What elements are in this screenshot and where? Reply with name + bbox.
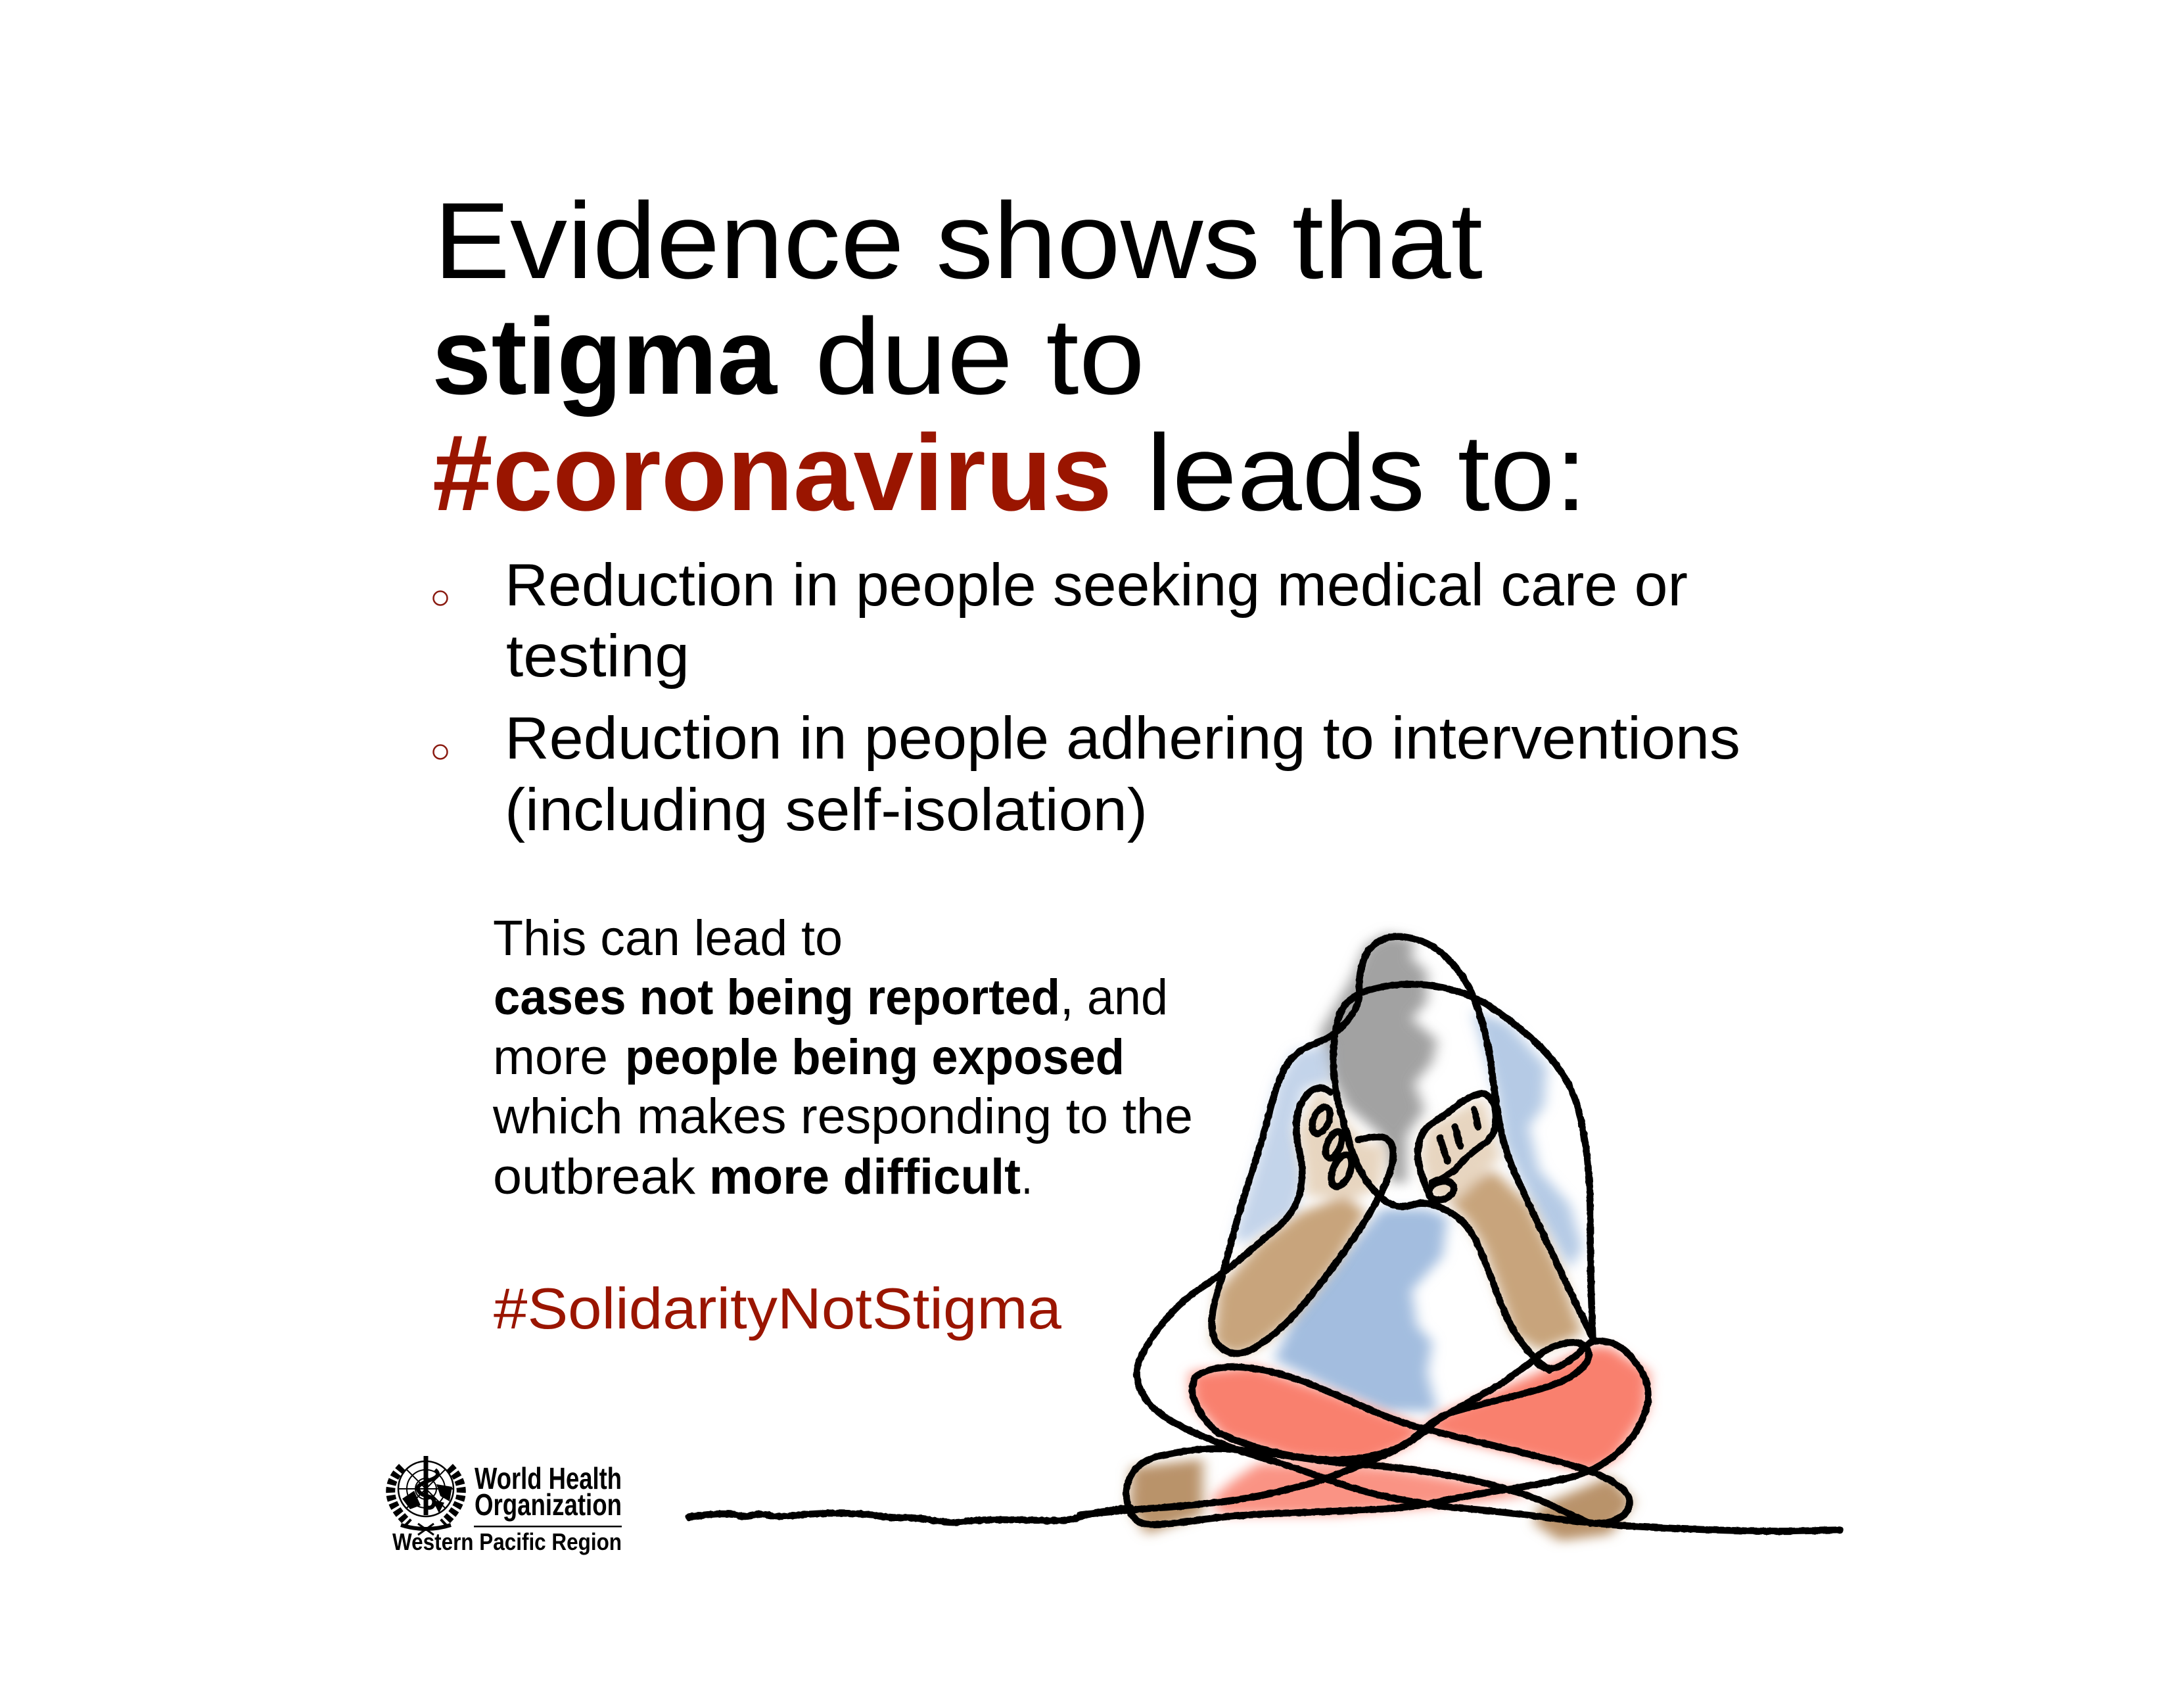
region name: Western Pacific Region: [392, 1528, 622, 1555]
consequence paragraph: more: [493, 1029, 608, 1085]
bullet 2 text: (including self-isolation): [505, 777, 1148, 843]
lower thigh crossing: [1192, 1362, 1531, 1460]
right hand outline: [1418, 1093, 1496, 1200]
organisation name: [475, 1461, 622, 1522]
title: [432, 180, 1587, 533]
organisation name: Organization: [475, 1488, 622, 1522]
watercolour: hair: [1320, 933, 1437, 1183]
bullet list: [434, 552, 1740, 843]
bullet 2 text: [505, 705, 1740, 843]
hashtag: #SolidarityNotStigma: [494, 1276, 1061, 1341]
crossing leg, knee and foot loop: [1080, 1341, 1648, 1524]
bullet 1 text: testing: [506, 623, 689, 690]
consequence paragraph: , and: [1060, 970, 1168, 1025]
organisation name: World Health: [475, 1461, 622, 1495]
left arm and long sweep into the ground line: [1137, 1088, 1840, 1531]
right arm, head and left arm outline: [1212, 937, 1592, 1353]
back and head circle: [1334, 984, 1592, 1371]
consequence paragraph: cases not being reported: [494, 970, 1060, 1025]
line drawing: [1080, 937, 1840, 1531]
fingers right hand: [1440, 1110, 1478, 1161]
bullet marker 2: [434, 745, 447, 759]
title: stigma: [432, 296, 778, 417]
upper thigh loop and right foot: [1195, 1367, 1630, 1524]
WHO logo: [390, 1456, 622, 1555]
icon: WHO emblem: [390, 1456, 461, 1535]
bullet 2 text: Reduction in people adhering to interventions: [505, 705, 1740, 772]
consequence paragraph: people being exposed: [625, 1029, 1125, 1085]
title: due to: [815, 296, 1145, 417]
consequence paragraph: .: [1021, 1149, 1033, 1205]
title: leads to:: [1146, 412, 1587, 533]
bullet 1 text: Reduction in people seeking medical care or: [505, 552, 1688, 619]
bullet marker 1: [434, 592, 447, 605]
consequence paragraph: which makes responding to the: [492, 1089, 1193, 1144]
consequence paragraph: outbreak: [493, 1149, 696, 1205]
consequence paragraph: [492, 910, 1193, 1205]
fingers left hand: [1309, 1105, 1334, 1135]
watercolour: red trousers: [1190, 1347, 1649, 1515]
title: Evidence shows that: [434, 180, 1483, 301]
watercolour: blue shirt: [1234, 1010, 1583, 1411]
watercolour: skin: [1129, 1084, 1633, 1541]
title: #coronavirus: [432, 412, 1112, 533]
consequence paragraph: more difficult: [709, 1149, 1021, 1205]
consequence paragraph: This can lead to: [493, 910, 843, 966]
illustration: seated person holding head: [1080, 933, 1840, 1541]
ground line: [689, 1507, 1130, 1522]
bullet 1 text: [505, 552, 1688, 690]
